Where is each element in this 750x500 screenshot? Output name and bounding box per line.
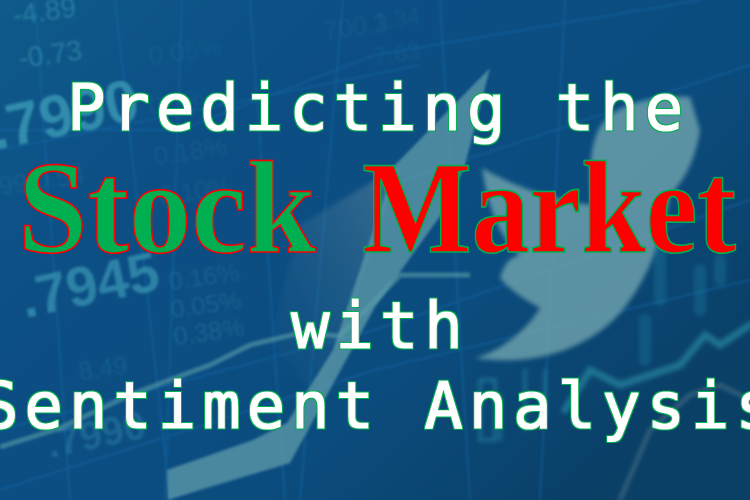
background numbers: 0.05% <box>169 286 243 324</box>
background numbers: .7945 <box>14 239 165 330</box>
title: with: with <box>291 290 469 364</box>
title: Predicting the: Predicting the <box>67 72 689 146</box>
background numbers: 0.16% <box>167 258 241 296</box>
background numbers: 8.49 <box>77 351 129 386</box>
background chart line <box>0 275 470 447</box>
background numbers: 700.3 <box>322 7 390 46</box>
background numbers: 0.38% <box>172 313 246 351</box>
background numbers: 0.18% <box>152 131 229 171</box>
background numbers: 0.05% <box>147 31 224 71</box>
background numbers: 0.10% <box>157 171 234 211</box>
background numbers: -0.73 <box>17 34 84 74</box>
background candlesticks and right chart <box>480 250 750 500</box>
background numbers: 0.38% <box>147 81 224 121</box>
background numbers: 1.34 <box>372 3 422 36</box>
icon: twitter bird <box>475 97 700 360</box>
background numbers: 7.63 <box>372 38 422 71</box>
icon: up arrow trend <box>167 68 490 500</box>
background numbers: .7990 <box>43 403 150 467</box>
background numbers <box>0 0 422 467</box>
title: Stock: Stock <box>18 134 317 281</box>
